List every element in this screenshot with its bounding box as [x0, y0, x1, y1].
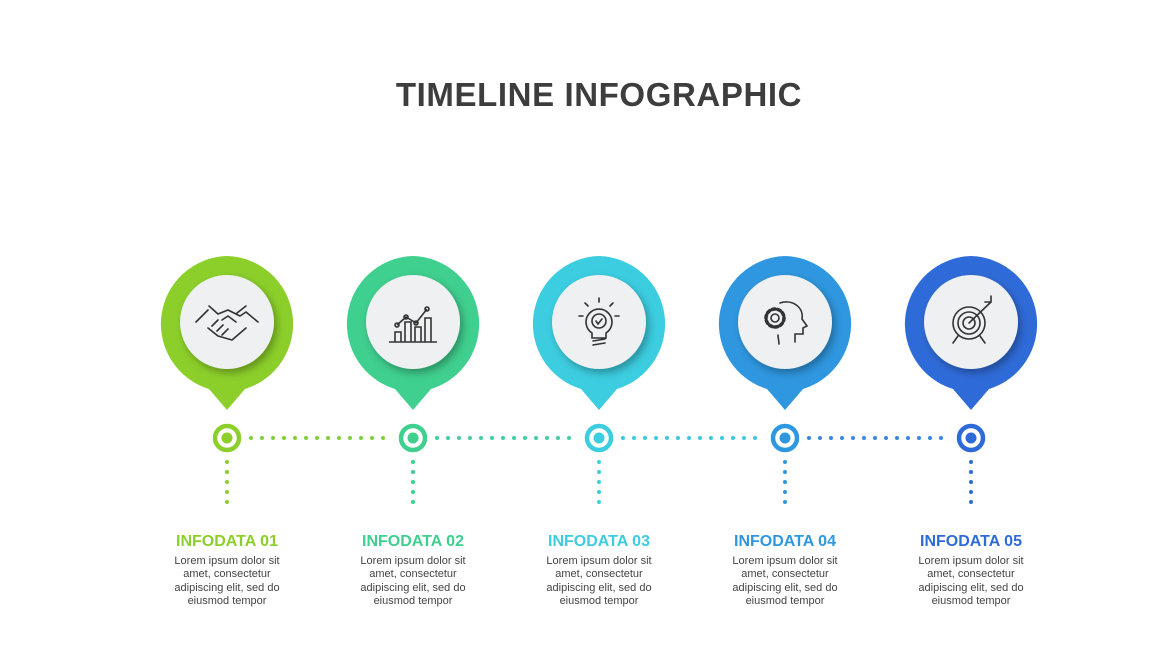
step 2: amet, consectetur — [369, 568, 457, 580]
step 2: eiusmod tempor — [374, 595, 453, 607]
step 2: adipiscing elit, sed do — [360, 582, 466, 594]
step 4: Lorem ipsum dolor sit — [732, 555, 838, 567]
icon: handshake — [196, 306, 258, 340]
step 3: eiusmod tempor — [560, 595, 639, 607]
icon: head with gear — [766, 302, 807, 344]
step 4 — [719, 256, 851, 607]
step 5: amet, consectetur — [927, 568, 1015, 580]
step 1: INFODATA 01 — [176, 533, 278, 550]
title: TIMELINE INFOGRAPHIC — [396, 76, 802, 113]
icon: lightbulb — [579, 298, 619, 345]
step 2 — [347, 256, 479, 607]
step 1: amet, consectetur — [183, 568, 271, 580]
step 3: amet, consectetur — [555, 568, 643, 580]
step 4: adipiscing elit, sed do — [732, 582, 838, 594]
step 3: Lorem ipsum dolor sit — [546, 555, 652, 567]
step 1: eiusmod tempor — [188, 595, 267, 607]
step 5: adipiscing elit, sed do — [918, 582, 1024, 594]
icon: target — [953, 296, 991, 343]
step 4: eiusmod tempor — [746, 595, 825, 607]
step 4: amet, consectetur — [741, 568, 829, 580]
step 3 — [533, 256, 665, 607]
step 1: Lorem ipsum dolor sit — [174, 555, 280, 567]
icon: bar chart — [389, 307, 437, 342]
step 1: adipiscing elit, sed do — [174, 582, 280, 594]
step 3: INFODATA 03 — [548, 533, 650, 550]
step 5 — [905, 256, 1037, 607]
step 3: adipiscing elit, sed do — [546, 582, 652, 594]
step 2: INFODATA 02 — [362, 533, 464, 550]
step 5: INFODATA 05 — [920, 533, 1022, 550]
step 5: Lorem ipsum dolor sit — [918, 555, 1024, 567]
timeline dotted line — [251, 436, 950, 440]
step 4: INFODATA 04 — [734, 533, 836, 550]
step 1 — [161, 256, 293, 607]
step 2: Lorem ipsum dolor sit — [360, 555, 466, 567]
step 5: eiusmod tempor — [932, 595, 1011, 607]
